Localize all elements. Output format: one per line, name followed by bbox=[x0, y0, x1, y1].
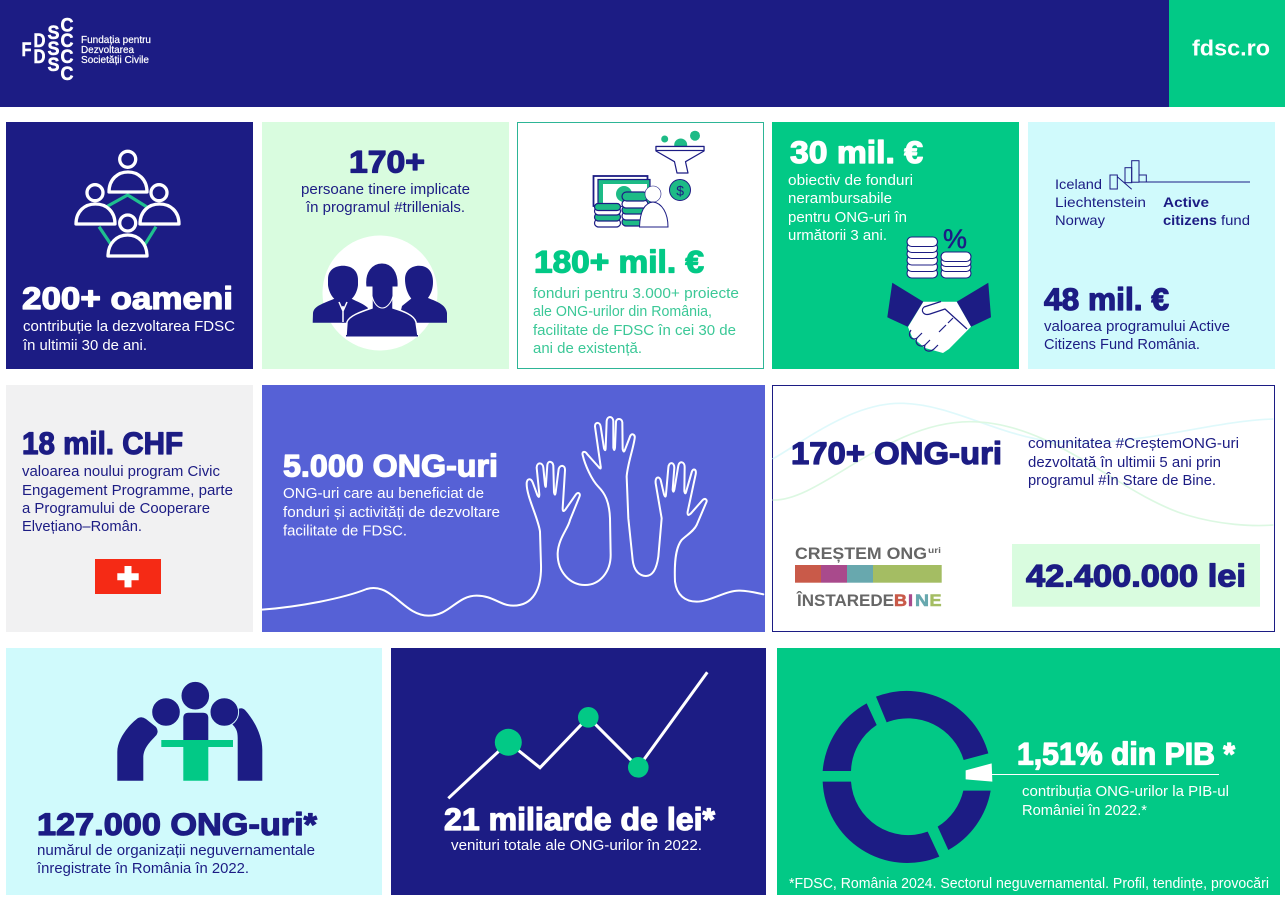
panel: 1,51% din PIB bbox=[777, 648, 1280, 895]
description: valoarea noului program Civic bbox=[22, 464, 220, 480]
logo: FDSC: D bbox=[34, 47, 46, 68]
logo: Active Citizens Fund: Liechtenstein bbox=[1055, 194, 1146, 210]
footnote: *FDSC, România 2024. Sectorul neguvernamental. Profil, tendințe, provocări bbox=[789, 876, 1269, 892]
panel: 48 mil. € Active Citizens Fund bbox=[1028, 122, 1275, 369]
heading: 170+ ONG-uri bbox=[791, 435, 1002, 471]
icon: Swiss flag bbox=[95, 559, 161, 594]
icon: connected people bbox=[76, 151, 179, 256]
heading: 170+ bbox=[349, 144, 425, 180]
description: facilitate de FDSC în cei 30 de bbox=[533, 323, 736, 339]
description bbox=[22, 319, 235, 354]
website tab bbox=[1169, 0, 1285, 107]
description: dezvoltată în ultimii 5 ani prin bbox=[1028, 455, 1221, 471]
description: nerambursabile bbox=[788, 191, 892, 207]
icon: coins and percent bbox=[907, 224, 971, 278]
description bbox=[1022, 784, 1229, 819]
logo: Active Citizens Fund: Active bbox=[1163, 194, 1209, 210]
icon: three people in white circle bbox=[313, 236, 447, 350]
logo: FDSC: C bbox=[60, 47, 74, 68]
icon: people around a table bbox=[117, 681, 262, 781]
description: comunitatea #CreștemONG-uri bbox=[1028, 436, 1239, 452]
description bbox=[788, 173, 913, 244]
description: Citizens Fund România. bbox=[1044, 337, 1200, 353]
logo: Creștem ONG-uri / În Stare de Bine: B bbox=[894, 591, 907, 610]
logo: Creștem ONG-uri / În Stare de Bine: I bbox=[908, 591, 913, 610]
description: valoarea programului Active bbox=[1044, 319, 1230, 335]
logo: FDSC: Dezvoltarea bbox=[81, 44, 134, 56]
logo: Active Citizens Fund: Iceland bbox=[1055, 176, 1102, 192]
description: ani de existență. bbox=[533, 341, 642, 357]
callout: 42.400.000 lei bbox=[1012, 544, 1260, 607]
logo: FDSC bbox=[22, 16, 151, 85]
description: pentru ONG-uri în bbox=[788, 210, 907, 226]
description: în programul #trillenials. bbox=[305, 200, 465, 216]
panel: 30 mil. € bbox=[772, 122, 1019, 369]
description: fonduri și activități de dezvoltare bbox=[283, 505, 500, 521]
logo: Creștem ONG-uri / În Stare de Bine: N bbox=[915, 591, 929, 610]
heading: 200+ oameni bbox=[22, 280, 233, 316]
logo: Creștem ONG-uri / În Stare de Bine bbox=[795, 544, 942, 610]
logo: FDSC: C bbox=[60, 64, 74, 85]
description: persoane tinere implicate bbox=[301, 182, 470, 198]
logo: Active Citizens Fund: fund bbox=[1221, 212, 1250, 228]
heading: 48 mil. € bbox=[1044, 281, 1169, 317]
description: fonduri pentru 3.000+ proiecte bbox=[533, 286, 739, 302]
logo: Creștem ONG-uri / În Stare de Bine: uri bbox=[928, 546, 941, 555]
panel: 170+ persoane tinere bbox=[262, 122, 509, 369]
description: înregistrate în România în 2022. bbox=[36, 861, 249, 877]
panel: 170+ ONG-uri bbox=[772, 386, 1274, 632]
logo: FDSC: S bbox=[48, 55, 60, 76]
logo: Active Citizens Fund: citizens bbox=[1163, 212, 1217, 228]
panel: 180+ mil. € bbox=[518, 122, 764, 368]
description bbox=[22, 464, 233, 535]
description bbox=[301, 182, 470, 216]
header bar bbox=[0, 0, 1169, 107]
chart: rising line with dots bbox=[448, 672, 707, 798]
logo: FDSC: F bbox=[22, 40, 32, 61]
description bbox=[1044, 319, 1230, 353]
panel: 127.000 ONG-uri bbox=[6, 648, 382, 895]
chart: donut bbox=[823, 691, 1219, 863]
icon: funnel with money: $ bbox=[676, 182, 684, 198]
icon: funnel with money bbox=[594, 131, 704, 227]
heading: 21 miliarde de lei* bbox=[444, 801, 716, 837]
logo: Creștem ONG-uri / În Stare de Bine: CREȘTEM ONG bbox=[795, 544, 927, 563]
heading: 1,51% din PIB * bbox=[1017, 735, 1236, 771]
heading: 127.000 ONG-uri* bbox=[37, 806, 318, 842]
description: ale ONG-urilor din România, bbox=[533, 304, 712, 320]
description: României în 2022.* bbox=[1022, 803, 1147, 819]
panel: 21 miliarde de lei bbox=[391, 648, 766, 895]
description: contribuție la dezvoltarea FDSC bbox=[23, 319, 235, 335]
description bbox=[533, 286, 739, 357]
heading: 18 mil. CHF bbox=[22, 425, 183, 461]
description: obiectiv de fonduri bbox=[788, 173, 913, 189]
panel: 200+ oameni bbox=[6, 122, 253, 369]
icon: coins and percent: % bbox=[943, 224, 967, 254]
logo: Creștem ONG-uri / În Stare de Bine: ÎNSTAREDE bbox=[796, 591, 894, 610]
description: programul #În Stare de Bine. bbox=[1028, 472, 1216, 489]
description: în ultimii 30 de ani. bbox=[22, 338, 147, 354]
description: numărul de organizații neguvernamentale bbox=[37, 843, 315, 859]
heading: 180+ mil. € bbox=[534, 244, 704, 280]
logo: Active Citizens Fund bbox=[1055, 161, 1250, 228]
description bbox=[1028, 436, 1239, 489]
description: contribuția ONG-urilor la PIB-ul bbox=[1022, 784, 1229, 800]
panel: 5.000 ONG-uri bbox=[262, 385, 765, 632]
description: ONG-uri care au beneficiat de bbox=[283, 486, 484, 502]
description: venituri totale ale ONG-urilor în 2022. bbox=[451, 838, 702, 854]
logo: FDSC: Fundația pentru bbox=[81, 34, 151, 46]
logo: Active Citizens Fund: Norway bbox=[1055, 212, 1105, 228]
description: facilitate de FDSC. bbox=[283, 524, 407, 540]
logo: FDSC: Societății Civile bbox=[81, 54, 149, 66]
callout: 42.400.000 lei: 42.400.000 lei bbox=[1026, 558, 1246, 594]
logo: FDSC: D bbox=[34, 31, 46, 52]
panel: 18 mil. CHF bbox=[6, 385, 253, 632]
website tab: fdsc.ro bbox=[1192, 36, 1270, 60]
logo: FDSC: C bbox=[60, 31, 74, 52]
logo: FDSC: S bbox=[48, 39, 60, 60]
icon: handshake bbox=[887, 283, 991, 353]
heading: 5.000 ONG-uri bbox=[283, 448, 498, 484]
description: a Programului de Cooperare bbox=[22, 501, 210, 517]
description: Elvețiano–Român. bbox=[22, 519, 142, 535]
description: Engagement Programme, parte bbox=[22, 483, 233, 499]
illustration: raised hands line bbox=[262, 417, 763, 616]
description bbox=[283, 486, 500, 540]
description bbox=[36, 843, 315, 877]
description: următorii 3 ani. bbox=[788, 228, 887, 244]
logo: FDSC: S bbox=[48, 23, 60, 44]
logo: FDSC: C bbox=[60, 16, 74, 36]
heading: 30 mil. € bbox=[790, 134, 923, 170]
logo: Creștem ONG-uri / În Stare de Bine: E bbox=[930, 591, 942, 610]
